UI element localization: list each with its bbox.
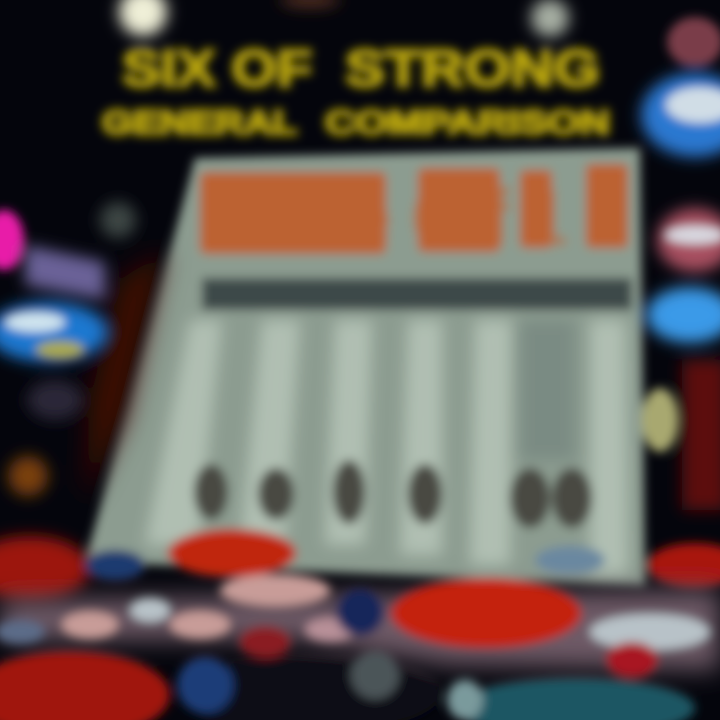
red lozenge centre (391, 578, 581, 648)
blue spot left (85, 550, 145, 580)
lights at top (100, 0, 569, 238)
bottom foreground (0, 529, 720, 720)
panel: main board (85, 148, 645, 585)
white highlight (5, 312, 65, 332)
dark red strip (85, 250, 165, 500)
left side decorations (0, 210, 165, 600)
title: COMPARISON (325, 104, 610, 142)
white band (665, 226, 720, 244)
top sign (667, 17, 720, 67)
grey spot (351, 651, 399, 699)
muted sign (27, 380, 83, 420)
title: STRONG (345, 40, 600, 98)
red area (0, 536, 90, 600)
red spot (239, 626, 291, 658)
orange light (8, 456, 48, 496)
dark red column (682, 360, 720, 510)
column shade (520, 320, 575, 460)
blue spot (336, 588, 384, 636)
title: SIX OF (122, 40, 312, 98)
column stripes (145, 320, 628, 575)
red lozenge left (168, 529, 296, 577)
patterned floor (0, 590, 720, 670)
red bar (647, 543, 720, 587)
blue spot right (535, 546, 605, 574)
column values (194, 460, 592, 528)
title (102, 40, 610, 142)
panel background (85, 148, 645, 585)
headline (200, 164, 628, 254)
yellow highlight (36, 341, 84, 359)
right side decorations (641, 17, 720, 587)
pale edge (447, 680, 483, 720)
headline text: Game Off 1 2 (200, 173, 625, 262)
blue bottom (177, 657, 233, 713)
magenta light (0, 210, 24, 270)
blue sign (641, 73, 720, 157)
blue lower sign (646, 287, 720, 343)
teal base (455, 678, 695, 720)
yellow light (642, 388, 678, 452)
white patches (0, 598, 710, 650)
red and white sign (657, 208, 720, 272)
red spot right (606, 642, 658, 678)
dark centre bottom (180, 657, 440, 720)
table header band (202, 278, 632, 310)
title: GENERAL (102, 104, 297, 142)
pink patches (62, 574, 355, 642)
lavender sign (25, 245, 105, 300)
white highlight (666, 87, 720, 123)
red blob bottom left (0, 651, 170, 720)
blue sign (0, 302, 108, 362)
